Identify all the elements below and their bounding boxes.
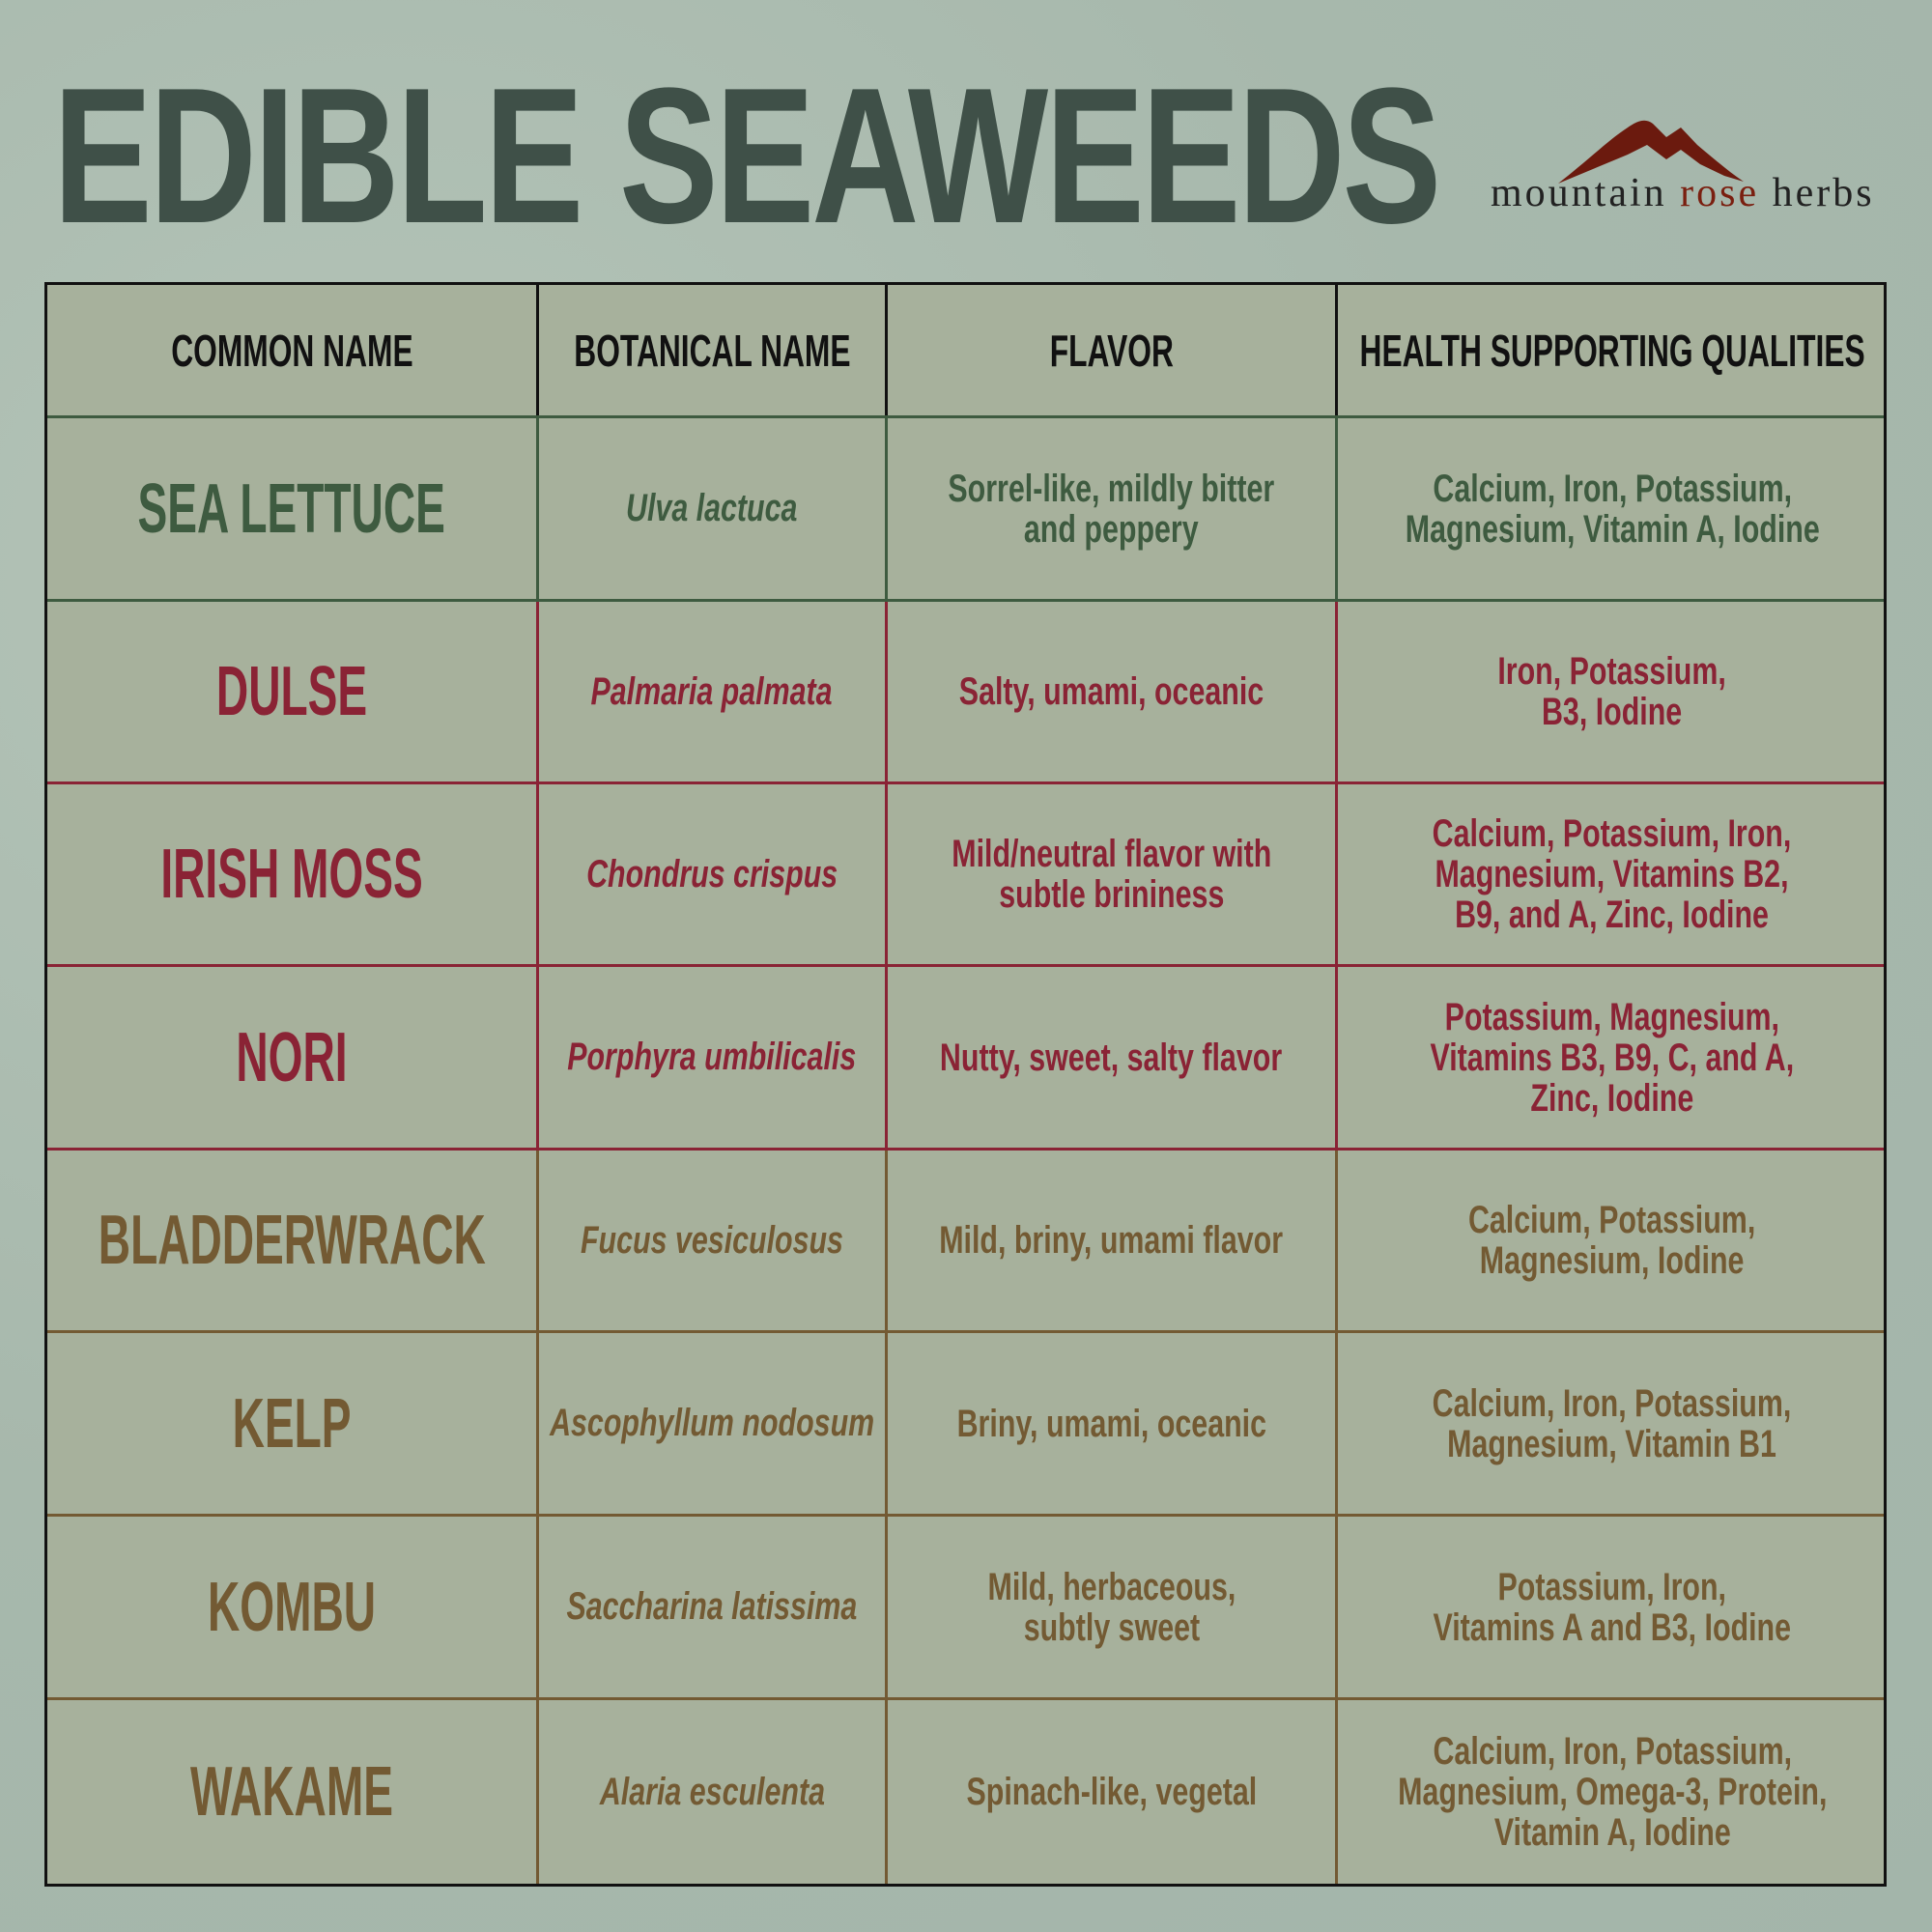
row: kelp: Magnesium, Vitamin B1	[1448, 1422, 1776, 1464]
row: kombu: Potassium, Iron,	[1498, 1565, 1726, 1607]
row: irish moss: B9, and A, Zinc, Iodine	[1456, 894, 1769, 936]
row: nori: Potassium, Magnesium,	[1445, 995, 1779, 1037]
row: kombu: Vitamins A and B3, Iodine	[1434, 1605, 1791, 1648]
row: kelp	[47, 1333, 1884, 1517]
title: EDIBLE SEAWEEDS	[53, 48, 1438, 264]
row: irish moss: IRISH MOSS	[160, 836, 423, 913]
row: irish moss: Calcium, Potassium, Iron,	[1433, 812, 1792, 855]
row: dulse: Salty, umami, oceanic	[959, 670, 1264, 713]
row: irish moss: Chondrus crispus	[586, 852, 838, 895]
row: bladderwrack	[47, 1151, 1884, 1333]
row: kombu: Saccharina latissima	[567, 1585, 857, 1628]
row: bladderwrack: Mild, briny, umami flavor	[940, 1219, 1283, 1262]
row: kelp: KELP	[233, 1385, 351, 1463]
row: sea lettuce: Calcium, Iron, Potassium,	[1433, 468, 1792, 510]
row: bladderwrack: Fucus vesiculosus	[581, 1219, 843, 1262]
header row: COMMON NAME	[171, 325, 412, 375]
header row: FLAVOR	[1049, 325, 1174, 375]
row: kombu	[47, 1517, 1884, 1700]
header row: BOTANICAL NAME	[574, 325, 850, 375]
row: kombu: Mild, herbaceous,	[987, 1565, 1236, 1607]
row: sea lettuce: SEA LETTUCE	[138, 469, 445, 547]
table	[44, 282, 1887, 1887]
row: bladderwrack: BLADDERWRACK	[98, 1202, 486, 1279]
header row: HEALTH SUPPORTING QUALITIES	[1359, 325, 1865, 375]
row: irish moss: Magnesium, Vitamins B2,	[1435, 853, 1789, 895]
row: dulse	[47, 602, 1884, 784]
row: dulse: B3, Iodine	[1542, 691, 1683, 733]
icon: mountain	[1558, 120, 1744, 184]
row: wakame: Magnesium, Omega-3, Protein,	[1398, 1771, 1827, 1813]
row: kelp: Briny, umami, oceanic	[956, 1403, 1266, 1445]
row: wakame: WAKAME	[190, 1753, 393, 1831]
row: dulse: DULSE	[216, 653, 367, 730]
logo: mountain rose herbs	[1491, 120, 1875, 215]
row: nori: NORI	[236, 1018, 348, 1095]
row: sea lettuce: Ulva lactuca	[626, 487, 798, 529]
row: bladderwrack: Calcium, Potassium,	[1468, 1199, 1756, 1241]
row: wakame: Alaria esculenta	[599, 1770, 825, 1812]
row: wakame: Calcium, Iron, Potassium,	[1433, 1730, 1792, 1773]
row: kelp: Calcium, Iron, Potassium,	[1433, 1381, 1792, 1424]
row: sea lettuce: Magnesium, Vitamin A, Iodine	[1405, 508, 1820, 551]
row: sea lettuce	[47, 418, 1884, 602]
row: irish moss: Mild/neutral flavor with	[952, 833, 1271, 875]
row: wakame: Spinach-like, vegetal	[966, 1771, 1257, 1813]
row: sea lettuce: Sorrel-like, mildly bitter	[949, 468, 1274, 510]
row: nori: Porphyra umbilicalis	[567, 1036, 857, 1078]
row: bladderwrack: Magnesium, Iodine	[1480, 1239, 1745, 1282]
row: irish moss: subtle brininess	[999, 873, 1224, 916]
row: irish moss	[47, 784, 1884, 967]
row: wakame: Vitamin A, Iodine	[1494, 1811, 1730, 1854]
row: kombu: KOMBU	[208, 1569, 376, 1646]
row: dulse: Palmaria palmata	[591, 670, 833, 713]
row: sea lettuce: and peppery	[1024, 508, 1199, 551]
row: kombu: subtly sweet	[1023, 1605, 1200, 1648]
row: kelp: Ascophyllum nodosum	[550, 1402, 874, 1444]
logo text: mountain rose herbs	[1491, 171, 1875, 215]
row: nori: Vitamins B3, B9, C, and A,	[1431, 1036, 1794, 1078]
row: dulse: Iron, Potassium,	[1498, 650, 1726, 693]
row: nori: Nutty, sweet, salty flavor	[940, 1036, 1283, 1078]
row: nori: Zinc, Iodine	[1531, 1076, 1693, 1119]
row: nori	[47, 967, 1884, 1151]
row: wakame	[190, 1700, 1827, 1884]
header row	[47, 285, 1884, 418]
